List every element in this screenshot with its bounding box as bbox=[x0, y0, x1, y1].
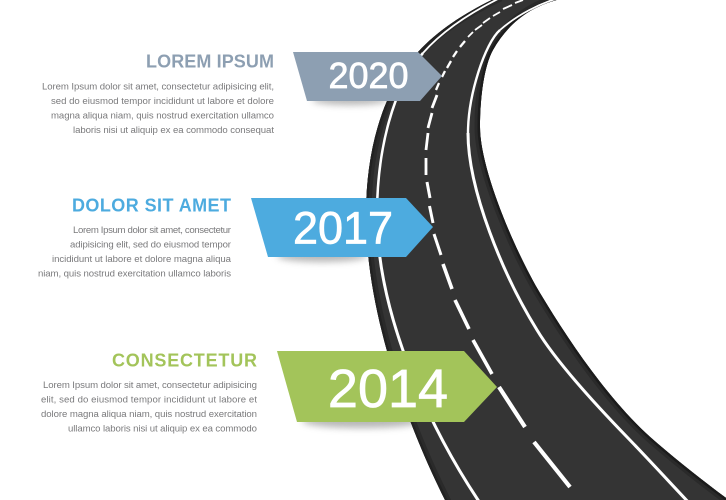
body text: elit, sed do eiusmod tempor incididunt ut labore et bbox=[41, 394, 257, 406]
road bbox=[366, 0, 726, 500]
centre dashed line bbox=[426, 0, 570, 487]
left lane line bbox=[377, 0, 504, 500]
body text: laboris nisi ut aliquip ex ea commodo consequat bbox=[73, 125, 274, 136]
flag: 2014 bbox=[277, 351, 497, 422]
body text bbox=[41, 380, 257, 434]
road edge shading bbox=[366, 0, 726, 500]
body text: dolore magna aliqua niam, quis nostrud exercitation bbox=[41, 409, 257, 420]
shadow: 2014 flag bbox=[302, 414, 422, 428]
heading: Dolor Sit Amet: DOLOR SIT AMET bbox=[72, 196, 231, 216]
road surface bbox=[366, 0, 726, 500]
right lane line bbox=[468, 0, 710, 500]
body text: Lorem Ipsum dolor sit amet, consectetur adipisicing bbox=[43, 380, 257, 391]
heading: Consectetur: CONSECTETUR bbox=[112, 350, 257, 370]
body text: incididunt ut labore et dolore magna aliqua bbox=[52, 254, 232, 265]
shadow: 2017 flag bbox=[277, 250, 367, 262]
year: 2017: 2017 bbox=[293, 202, 393, 254]
body text: sed do eiusmod tempor incididunt ut labore et dolore bbox=[51, 96, 274, 107]
body text: niam, quis nostrud exercitation ullamco laboris bbox=[38, 268, 231, 280]
text block: Dolor Sit Amet bbox=[38, 196, 232, 280]
body text: adipisicing elit, sed do eiusmod tempor bbox=[70, 240, 232, 250]
body text: Lorem Ipsum dolor sit amet, consectetur bbox=[73, 225, 232, 236]
flag: 2017 bbox=[251, 198, 433, 257]
heading: Lorem Ipsum: LOREM IPSUM bbox=[146, 52, 274, 72]
shadow: 2020 flag bbox=[312, 95, 388, 105]
body text: ullamco laboris nisi ut aliquip ex ea commodo bbox=[68, 424, 257, 434]
text block: Lorem Ipsum bbox=[42, 52, 274, 136]
flag: 2020 bbox=[293, 52, 442, 101]
year: 2014: 2014 bbox=[328, 359, 448, 419]
body text: magna aliqua niam, quis nostrud exercitation ullamco bbox=[51, 110, 274, 122]
body text bbox=[38, 225, 232, 280]
body text bbox=[42, 82, 274, 136]
year: 2020: 2020 bbox=[328, 55, 409, 96]
text block: Consectetur bbox=[41, 350, 257, 434]
body text: Lorem Ipsum dolor sit amet, consectetur adipisicing elit, bbox=[42, 82, 274, 92]
